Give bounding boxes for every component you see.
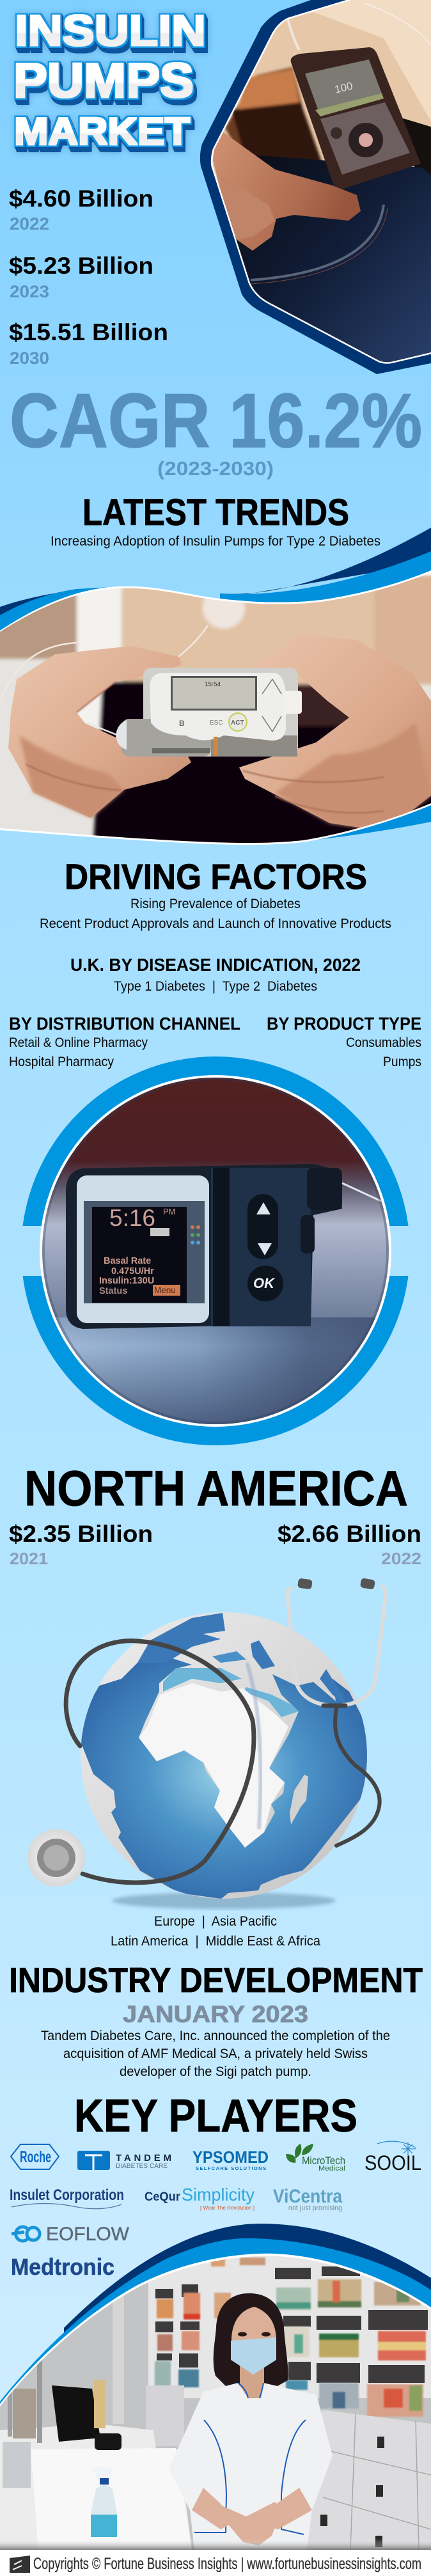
development text: acquisition of AMF Medical SA, a privately held Swiss bbox=[63, 2046, 368, 2061]
product type segment bbox=[267, 1014, 421, 1069]
market size 2030: $15.51 Billion bbox=[9, 319, 168, 345]
footer bbox=[0, 2550, 431, 2576]
logo: ViCentra: ViCentra bbox=[273, 2186, 342, 2207]
logo: CeQur Simplicity: [ Wear The Revolution ] bbox=[200, 2205, 255, 2211]
footer logo bbox=[10, 2556, 30, 2573]
other regions list: Latin America | Middle East & Africa bbox=[111, 1934, 320, 1949]
pump device: 100 bbox=[333, 80, 354, 96]
pump device: ACT bbox=[231, 719, 244, 726]
latest trends heading: LATEST TRENDS bbox=[82, 492, 349, 533]
product type segment: Consumables bbox=[346, 1035, 421, 1050]
market size 2022: $4.60 Billion bbox=[9, 185, 153, 212]
market size 2022: 2022 bbox=[10, 214, 49, 233]
title bbox=[13, 6, 206, 153]
driving factors text: Recent Product Approvals and Launch of Innovative Products bbox=[40, 916, 391, 931]
logo: Tandem: DIABETES CARE bbox=[116, 2163, 168, 2170]
latest trends text: Increasing Adoption of Insulin Pumps for Type 2 Diabetes bbox=[51, 534, 380, 549]
pump device: Status bbox=[99, 1286, 127, 1296]
development date: JANUARY 2023 bbox=[123, 2001, 308, 2027]
pump device: Menu bbox=[154, 1285, 176, 1295]
left hand bbox=[8, 646, 191, 818]
pump device: PM bbox=[163, 1207, 175, 1216]
logo: MicroTech Medical: MicroTech bbox=[302, 2155, 345, 2167]
north america 2022 value: 2022 bbox=[381, 1549, 421, 1568]
market size 2023: 2023 bbox=[10, 282, 49, 301]
disease indication segment: Type 1 Diabetes | Type 2 Diabetes bbox=[114, 979, 317, 994]
distribution channel segment: BY DISTRIBUTION CHANNEL bbox=[9, 1014, 240, 1033]
arc photo: pharmacist bbox=[0, 2224, 431, 2552]
stethoscope bbox=[66, 1578, 386, 1883]
market size 2023: $5.23 Billion bbox=[9, 253, 153, 279]
pump device: ESC bbox=[210, 719, 223, 726]
north america 2022 value bbox=[278, 1521, 421, 1568]
market size 2030 bbox=[9, 319, 168, 368]
right hand bbox=[239, 634, 431, 831]
logo: MicroTech Medical bbox=[286, 2144, 345, 2172]
spray bottle bbox=[91, 2467, 117, 2537]
logo: CeQur Simplicity: CeQur bbox=[145, 2190, 181, 2204]
title: MARKET bbox=[14, 110, 190, 153]
CAGR period: (2023-2030) bbox=[157, 457, 274, 480]
development text bbox=[41, 2029, 390, 2079]
development text: Tandem Diabetes Care, Inc. announced the completion of the bbox=[41, 2029, 390, 2043]
pump device: Insulin:130U bbox=[99, 1276, 154, 1286]
development text: developer of the Sigi patch pump. bbox=[120, 2064, 311, 2079]
logo: CeQur Simplicity bbox=[145, 2185, 255, 2211]
globe with stethoscope bbox=[27, 1578, 386, 1909]
key players heading: KEY PLAYERS bbox=[74, 2091, 357, 2142]
product type segment: Pumps bbox=[383, 1055, 421, 1069]
pump device bbox=[291, 47, 421, 189]
market size 2022 bbox=[9, 185, 153, 233]
lower cabinets bbox=[146, 2385, 431, 2550]
disease indication segment: U.K. BY DISEASE INDICATION, 2022 bbox=[70, 955, 361, 975]
logo: Tandem bbox=[77, 2151, 171, 2170]
pump device: B bbox=[179, 719, 185, 728]
logo: CeQur Simplicity: Simplicity bbox=[182, 2185, 255, 2204]
pump device: OK bbox=[253, 1275, 276, 1291]
pump device bbox=[66, 1164, 384, 1329]
pump device: 15:54 bbox=[205, 681, 221, 688]
shelf cells bbox=[155, 2266, 428, 2383]
logo: Sooil: SOOIL bbox=[364, 2151, 421, 2174]
counter and monitor bbox=[0, 2360, 192, 2550]
logo: Sooil bbox=[364, 2141, 421, 2174]
logo: Tandem: TANDEM bbox=[116, 2153, 171, 2164]
pump device bbox=[86, 668, 302, 757]
market size 2030: 2030 bbox=[10, 349, 49, 368]
hexagon photo: insulin pump in pocket bbox=[200, 0, 431, 384]
title: PUMPS bbox=[13, 54, 194, 108]
shelf products bbox=[155, 2258, 426, 2417]
other regions list bbox=[111, 1914, 320, 1949]
title: INSULIN bbox=[15, 6, 206, 55]
distribution channel segment: Hospital Pharmacy bbox=[9, 1055, 114, 1069]
logo: ViCentra: not just promising bbox=[288, 2204, 342, 2212]
logo: Ypsomed: SELFCARE SOLUTIONS bbox=[196, 2165, 266, 2171]
pharmacist bbox=[169, 2293, 333, 2550]
driving factors text: Rising Prevalence of Diabetes bbox=[130, 897, 301, 911]
circle photo: insulin pump screen bbox=[21, 1056, 410, 1445]
market size 2023 bbox=[9, 253, 153, 301]
logo: MicroTech Medical: Medical bbox=[318, 2165, 345, 2172]
north america 2021 value: 2021 bbox=[10, 1549, 48, 1568]
chestpiece bbox=[27, 1829, 85, 1887]
north america 2021 value: $2.35 Billion bbox=[9, 1521, 153, 1547]
distribution channel segment: Retail & Online Pharmacy bbox=[9, 1035, 148, 1050]
north america 2021 value bbox=[9, 1521, 153, 1568]
logo: Medtronic: Medtronic bbox=[11, 2254, 114, 2280]
logo: Roche bbox=[11, 2144, 59, 2169]
disease indication segment bbox=[70, 955, 361, 994]
logo: Ypsomed: YPSOMED bbox=[192, 2148, 269, 2167]
other regions list: Europe | Asia Pacific bbox=[154, 1914, 277, 1929]
logo: EOFlow: EOFLOW bbox=[46, 2224, 130, 2245]
pump device: Basal Rate bbox=[104, 1256, 151, 1266]
driving factors text bbox=[40, 897, 391, 931]
logo: Roche: Roche bbox=[20, 2148, 51, 2166]
north america 2022 value: $2.66 Billion bbox=[278, 1521, 421, 1547]
logo: Insulet Corporation bbox=[10, 2187, 124, 2209]
pump device: 0.475U/Hr bbox=[111, 1266, 154, 1276]
pump device: 5:16 bbox=[109, 1205, 155, 1231]
wave photo: hands holding pump bbox=[0, 528, 431, 857]
driving factors heading: DRIVING FACTORS bbox=[65, 856, 367, 897]
distribution channel segment bbox=[9, 1014, 240, 1069]
logo: Insulet Corporation: Insulet Corporation bbox=[10, 2187, 124, 2204]
